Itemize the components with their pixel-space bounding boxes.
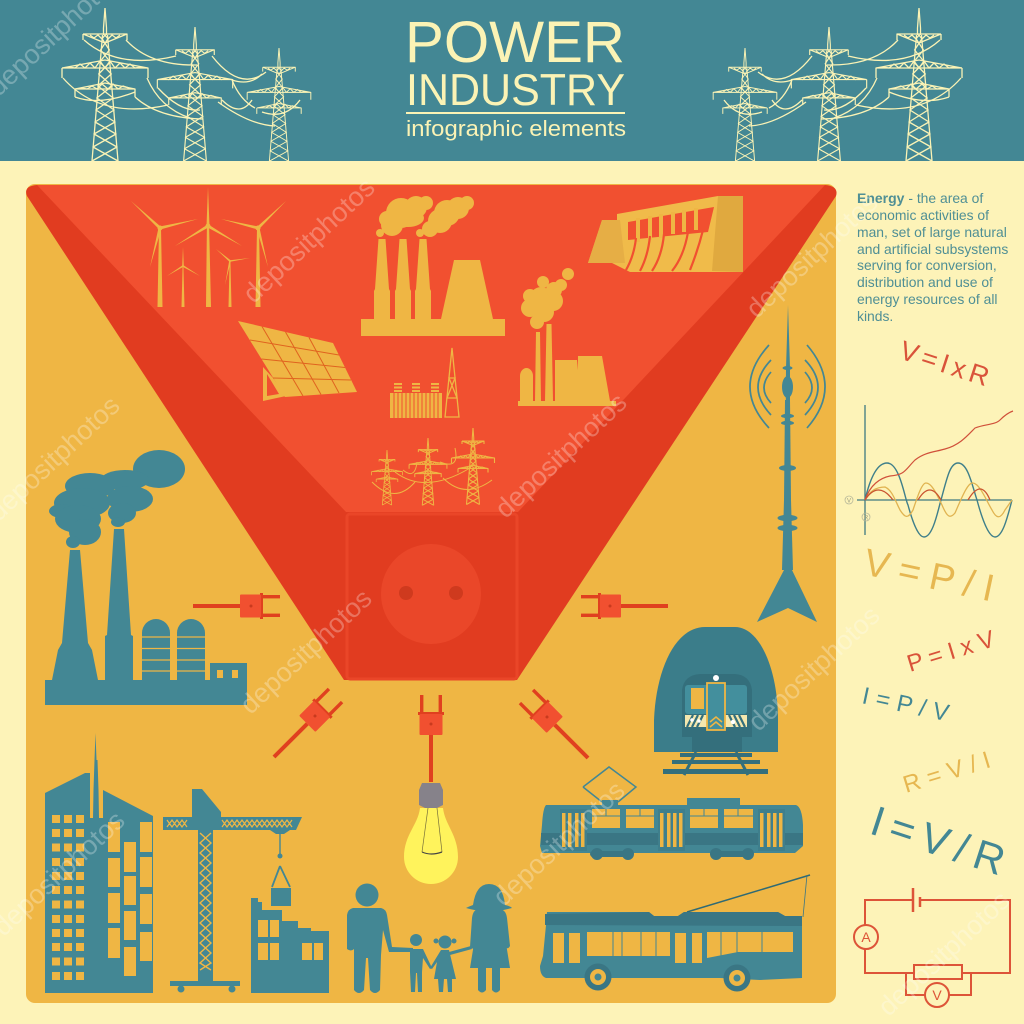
formula V=IxR: V = I x R — [896, 335, 993, 392]
energy definition: Energy - the area of — [857, 190, 983, 206]
formula I=P/V: I = P / V — [860, 682, 951, 727]
line chart: R — [864, 516, 869, 522]
tram — [540, 767, 803, 860]
plugs — [193, 593, 668, 782]
formula R=V/I: R = V / I — [900, 747, 994, 799]
formula P=IxV: P = I x V — [904, 626, 998, 678]
wind turbines — [131, 187, 286, 307]
funnel — [26, 185, 837, 680]
formula V=P/I: V = P / I — [860, 542, 998, 610]
power lines left — [62, 8, 311, 161]
energy definition: serving for conversion, — [857, 257, 997, 273]
main yellow panel — [26, 184, 836, 1003]
title: POWER — [405, 10, 625, 75]
energy definition: distribution and use of — [857, 274, 993, 290]
light bulb — [404, 783, 458, 884]
watermarks: depositphotos — [742, 600, 886, 737]
energy definition: and artificial subsystems — [857, 241, 1008, 257]
hydro dam — [588, 196, 743, 272]
circuit diagram — [854, 888, 1010, 1007]
family — [347, 884, 512, 993]
watermarks: depositphotos — [872, 885, 1016, 1022]
energy definition: energy resources of all — [857, 291, 998, 307]
title: infographic elements — [406, 116, 626, 141]
title — [405, 10, 626, 141]
factory — [45, 450, 247, 705]
woman — [466, 884, 512, 992]
crane — [163, 789, 302, 992]
substation — [390, 348, 459, 418]
thermal power plant — [518, 268, 616, 406]
title: INDUSTRY — [406, 66, 625, 115]
energy definition: kinds. — [857, 308, 893, 324]
coal power plant — [361, 196, 505, 336]
circuit diagram: A — [861, 929, 871, 945]
unfinished building — [251, 898, 329, 993]
line chart — [845, 405, 1013, 537]
transmission towers in funnel — [372, 428, 494, 505]
watermarks: depositphotos — [237, 172, 381, 309]
solar panel — [238, 321, 357, 401]
formula I=V/R: I = V / R — [865, 797, 1011, 884]
watermarks: depositphotos — [740, 187, 884, 324]
TV tower — [750, 305, 825, 622]
line chart: V — [847, 498, 851, 504]
energy definition — [857, 190, 1008, 324]
energy definition: man, set of large natural — [857, 224, 1007, 240]
circuit diagram: V — [932, 987, 942, 1003]
boy — [410, 934, 432, 992]
girl — [430, 936, 472, 992]
socket — [347, 514, 517, 679]
trolleybus — [540, 875, 810, 992]
man — [347, 884, 413, 993]
watermarks: depositphotos — [489, 387, 633, 524]
watermarks: depositphotos — [234, 583, 378, 720]
factory smoke — [49, 450, 185, 548]
energy definition: economic activities of — [857, 207, 989, 223]
header band — [0, 0, 1024, 161]
skyscraper — [45, 733, 153, 993]
watermarks: depositphotos — [487, 775, 631, 912]
power lines right — [713, 8, 962, 161]
train in tunnel — [654, 627, 778, 775]
